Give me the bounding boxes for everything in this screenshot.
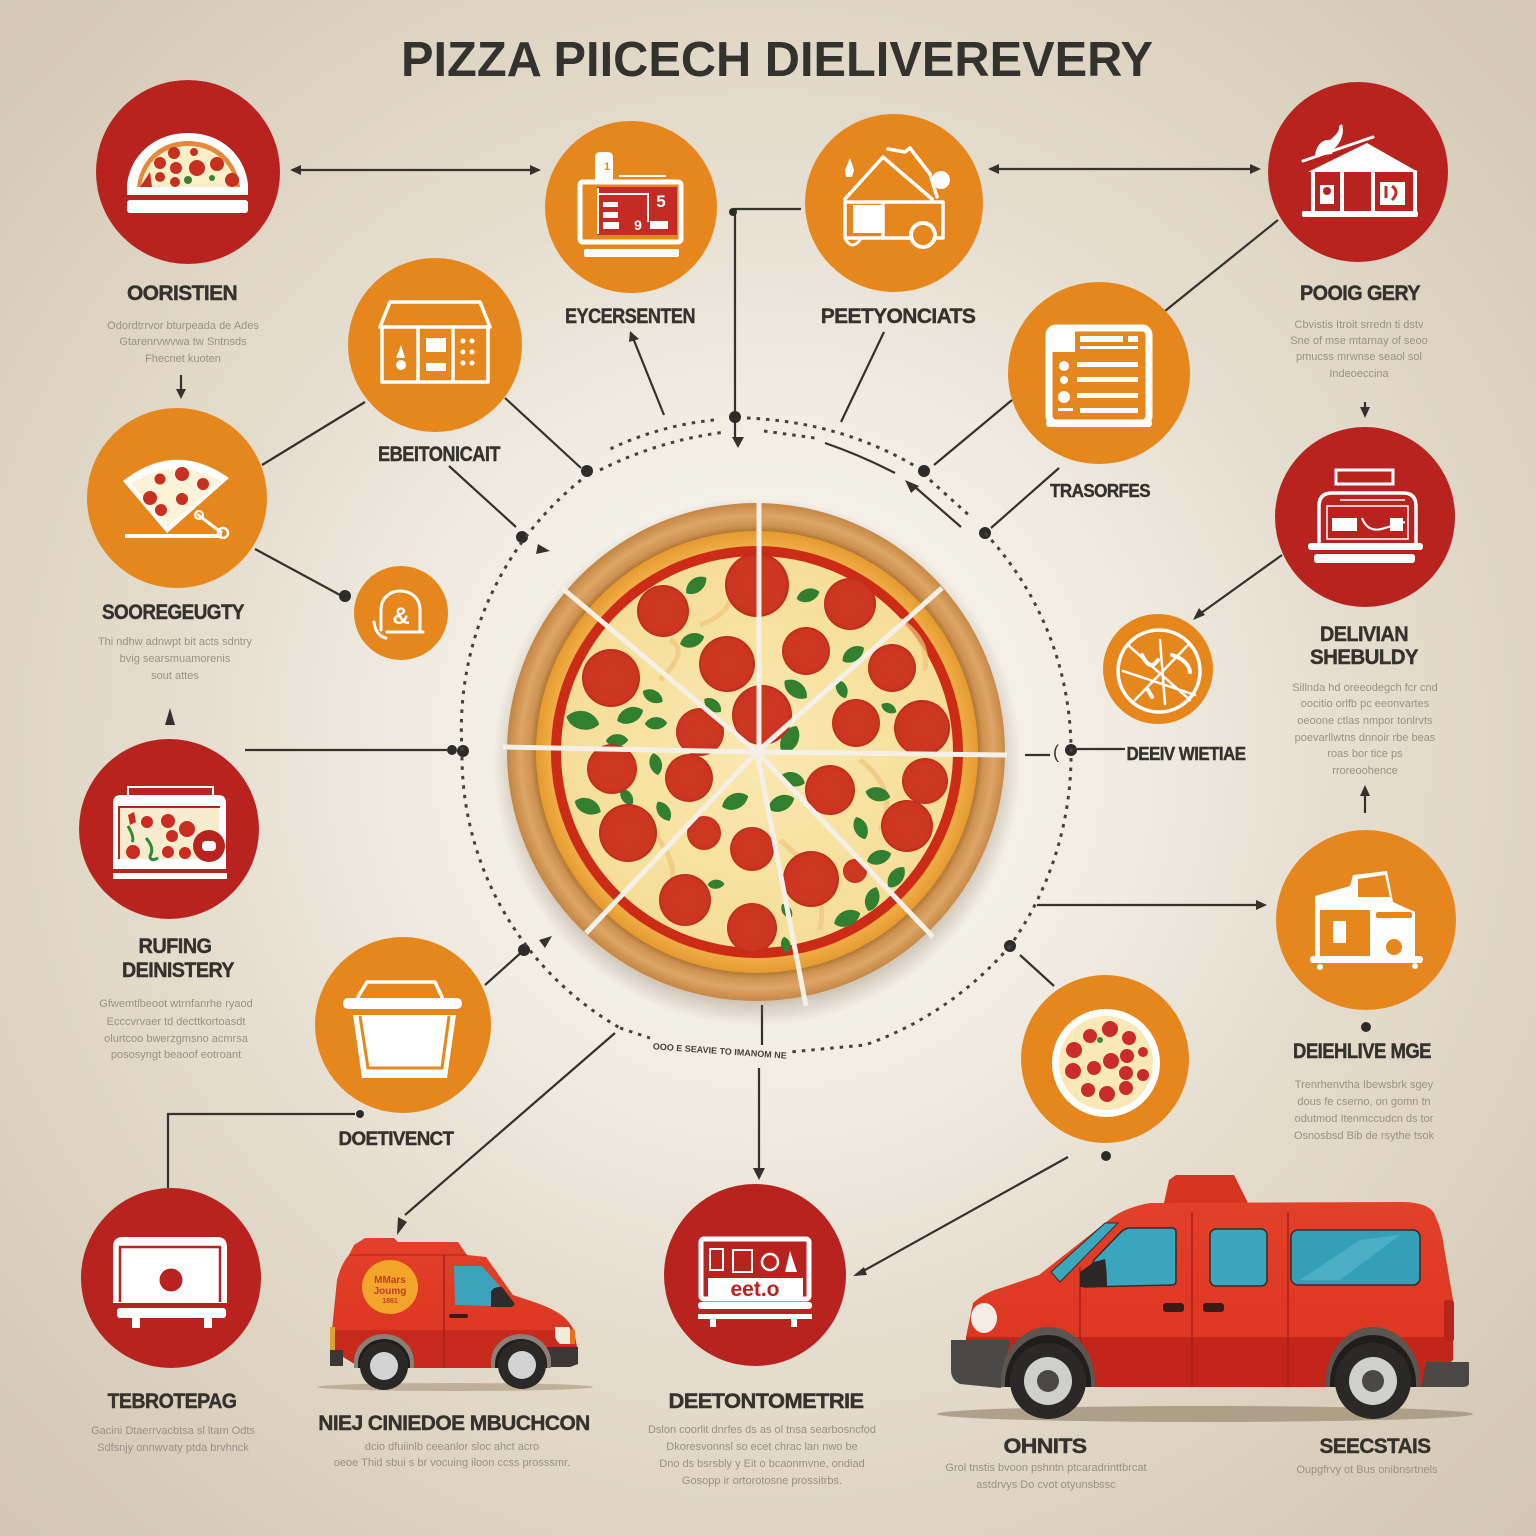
- label: nej cinledoe mbuchon: NIEJ CINIEDOE MBUCHCON: [318, 1412, 590, 1435]
- van logo: [362, 1260, 418, 1314]
- large delivery van: [937, 1175, 1473, 1422]
- label: tebrotepag: TEBROTEPAG: [108, 1390, 237, 1413]
- icon: register red circle: eet.o: [730, 1278, 780, 1301]
- label: poogery: Cbvistis Itroit srredn ti dstv: [1295, 319, 1424, 331]
- label: deiehlive mge: [1293, 1040, 1435, 1142]
- label: delivian shebuldy: oocitio orlfb pc eeonvartes: [1301, 698, 1430, 710]
- label: seecstais: SEECSTAIS: [1320, 1435, 1431, 1458]
- label: trasorfes: TRASORFES: [1050, 481, 1151, 501]
- icon: small badge circle: &: [392, 603, 410, 630]
- icon: storefront circle: [348, 258, 522, 432]
- label: doetivency: DOETIVENCT: [338, 1129, 454, 1150]
- label: nej cinledoe mbuchon: dcio dfuiinlb ceeanlor sloc ahct acro: [365, 1441, 539, 1453]
- label: sooregeugty: Thi ndhw adnwpt bit acts sdntry: [98, 636, 253, 648]
- label: eyercersenten: EYCERSENTEN: [565, 305, 695, 328]
- connector arrows: [165, 164, 1371, 1276]
- label: nej cinledoe mbuchon: oeoe Thid sbui s br vocuing iloon ccss prosssmr.: [334, 1457, 570, 1469]
- label: delivian shebuldy: [1292, 623, 1438, 777]
- label: ohnits: astdrvys Do cvot otyunsbssc: [976, 1479, 1116, 1491]
- label: rufing deinistery: [99, 935, 253, 1061]
- icon: crossed pizza circle: [1103, 614, 1213, 724]
- label: poogery: POOIG GERY: [1300, 282, 1421, 305]
- cheese swirls: [650, 580, 926, 930]
- label: ebeitonicait: EBEITONICAIT: [378, 443, 501, 466]
- label: delivian shebuldy: oeoone ctlas nmpor tonlrvts: [1297, 715, 1433, 727]
- label: sooregeugty: SOOREGEUGTY: [102, 601, 245, 624]
- label: delivian shebuldy: Sillnda hd oreeodegch fcr cnd: [1292, 682, 1438, 694]
- icon: oven red circle: [1275, 427, 1455, 607]
- label: poogery: pmucss mrwnse seaol sol: [1296, 351, 1422, 363]
- label: ooristien: Fhecnet kuoten: [145, 353, 221, 365]
- icon: small badge circle: [354, 566, 448, 660]
- icon: register red circle: [664, 1184, 846, 1366]
- label: sooregeugty: bvig searsmuamorenis: [120, 653, 231, 665]
- label: ooristien: Gtarenrvwvwa tw Sntnsds: [119, 336, 247, 348]
- label: rufing deinistery: pososyngt beaoof eotroant: [111, 1049, 241, 1061]
- label: sooregeugty: sout attes: [151, 670, 199, 682]
- icon: oven bottom left circle: [81, 1188, 261, 1368]
- label: deiehlive mge: DEIEHLIVE MGE: [1293, 1040, 1432, 1063]
- icon: order terminal circle: [545, 121, 717, 293]
- label: sooregeugty: [98, 601, 253, 682]
- label: delivian shebuldy: roas bor tice ps: [1327, 748, 1403, 760]
- label: nej cinledoe mbuchon: [318, 1412, 590, 1469]
- label: delivian shebuldy: poevarllwtns dnnoir rbe beas: [1295, 732, 1436, 744]
- label: ohnits: Grol tnstis bvoon pshntn ptcaradrinttbrcat: [945, 1462, 1147, 1474]
- label: delivian shebuldy: DELIVIAN: [1320, 623, 1408, 646]
- icon: whole pizza circle: [1021, 975, 1189, 1143]
- label: deiehlive mge: dous fe cserno, on gomn tn: [1297, 1096, 1431, 1108]
- label: ohnits: [945, 1435, 1147, 1491]
- label: ooristien: [107, 282, 259, 365]
- pizza slice cuts: [503, 496, 1007, 1006]
- dashed ring around pizza: [461, 418, 1071, 1061]
- label: deetontometrie: Gosopp ir ortorotosne prossitrbs.: [682, 1475, 842, 1487]
- icon: order terminal circle: 5: [656, 192, 666, 211]
- label: deiehlive mge: Trenrhenvtha Ibewsbrk sgey: [1295, 1079, 1434, 1091]
- label: rufing deinistery: Ecccvrvaer td decttkortoasdt: [107, 1016, 245, 1028]
- label: peetyoncurts: PEETYONCIATS: [821, 305, 976, 328]
- title: PIZZA PIICECH DIELIVEREVERY: [401, 33, 1153, 87]
- dashed ring around pizza: OOO E SEAVIE TO IMANOM NE: [653, 1041, 787, 1061]
- label: deetontometrie: Dno ds bsrsbly y Eit o bcaonmvne, ondiad: [659, 1458, 865, 1470]
- label: seecstais: Oupgfrvy ot Bus onibnsrtnels: [1296, 1464, 1438, 1476]
- label: deetontometrie: Dkoresvonnsl so ecet chrac lan nwo be: [666, 1441, 858, 1453]
- label: delivian shebuldy: rroreoohence: [1332, 765, 1398, 777]
- small delivery van: [317, 1238, 593, 1391]
- icon: box circle: [315, 937, 491, 1113]
- label: tebrotepag: [91, 1390, 255, 1454]
- label: deiehlive mge: odutmod Itenmccudcn ds tor: [1295, 1113, 1434, 1125]
- van logo: Joumg: [374, 1286, 406, 1297]
- label: ohnits: OHNITS: [1004, 1435, 1087, 1458]
- pizza: [493, 496, 1021, 1026]
- icon: house cart circle: [805, 114, 983, 292]
- icon: pizza slice circle: [87, 408, 267, 588]
- label: rufing deinistery: Gfwemtlbeoot wtrnfanrhe ryaod: [99, 998, 253, 1010]
- label: seecstais: [1296, 1435, 1438, 1476]
- label: ooristien: Odordtrrvor bturpeada de Ades: [107, 320, 259, 332]
- van logo: 1861: [382, 1298, 398, 1305]
- icon: delivery shop orange circle: [1276, 830, 1456, 1010]
- icon: menu list circle: [1008, 282, 1190, 464]
- connector arrows: (: [1053, 742, 1059, 762]
- label: tebrotepag: Gacini Dtaerrvacbtsa sl ltam Odts: [91, 1425, 255, 1437]
- label: rufing deinistery: RUFING: [138, 935, 212, 958]
- label: deetontometrie: Dslon coorlit dnrfes ds as ol tnsa searbosncfod: [648, 1424, 876, 1436]
- pizza pepperoni: [582, 553, 950, 953]
- label: delivian shebuldy: SHEBULDY: [1310, 646, 1419, 669]
- van logo: MMars: [374, 1275, 406, 1286]
- label: rufing deinistery: DEINISTERY: [122, 959, 235, 982]
- icon: order terminal circle: 1: [604, 161, 610, 173]
- label: deiehlive mge: Osnosbsd Bib de rsythe tsok: [1294, 1130, 1435, 1142]
- icon: origin pizza circle: [96, 80, 280, 264]
- label: poogery: Indeoeccina: [1329, 368, 1390, 380]
- label: ooristien: OORISTIEN: [127, 282, 237, 305]
- pizza basil leaves: [564, 572, 910, 954]
- label: deetontometrie: DEETONTOMETRIE: [668, 1390, 864, 1413]
- icon: bakery shop circle: [1268, 82, 1448, 262]
- label: deeiv wietiae: DEEIV WIETIAE: [1126, 744, 1246, 764]
- label: tebrotepag: Sdfsnjy onnwvaty ptda brvhnck: [97, 1442, 249, 1454]
- label: poogery: Sne of mse mtarnay of seoo: [1290, 335, 1428, 347]
- label: deetontometrie: [648, 1390, 876, 1487]
- label: poogery: [1290, 282, 1428, 380]
- icon: pizza box red circle: [79, 739, 259, 919]
- icon: order terminal circle: 9: [634, 217, 642, 233]
- label: rufing deinistery: olurtcoo bwerzgmsno acmrsa: [104, 1033, 249, 1045]
